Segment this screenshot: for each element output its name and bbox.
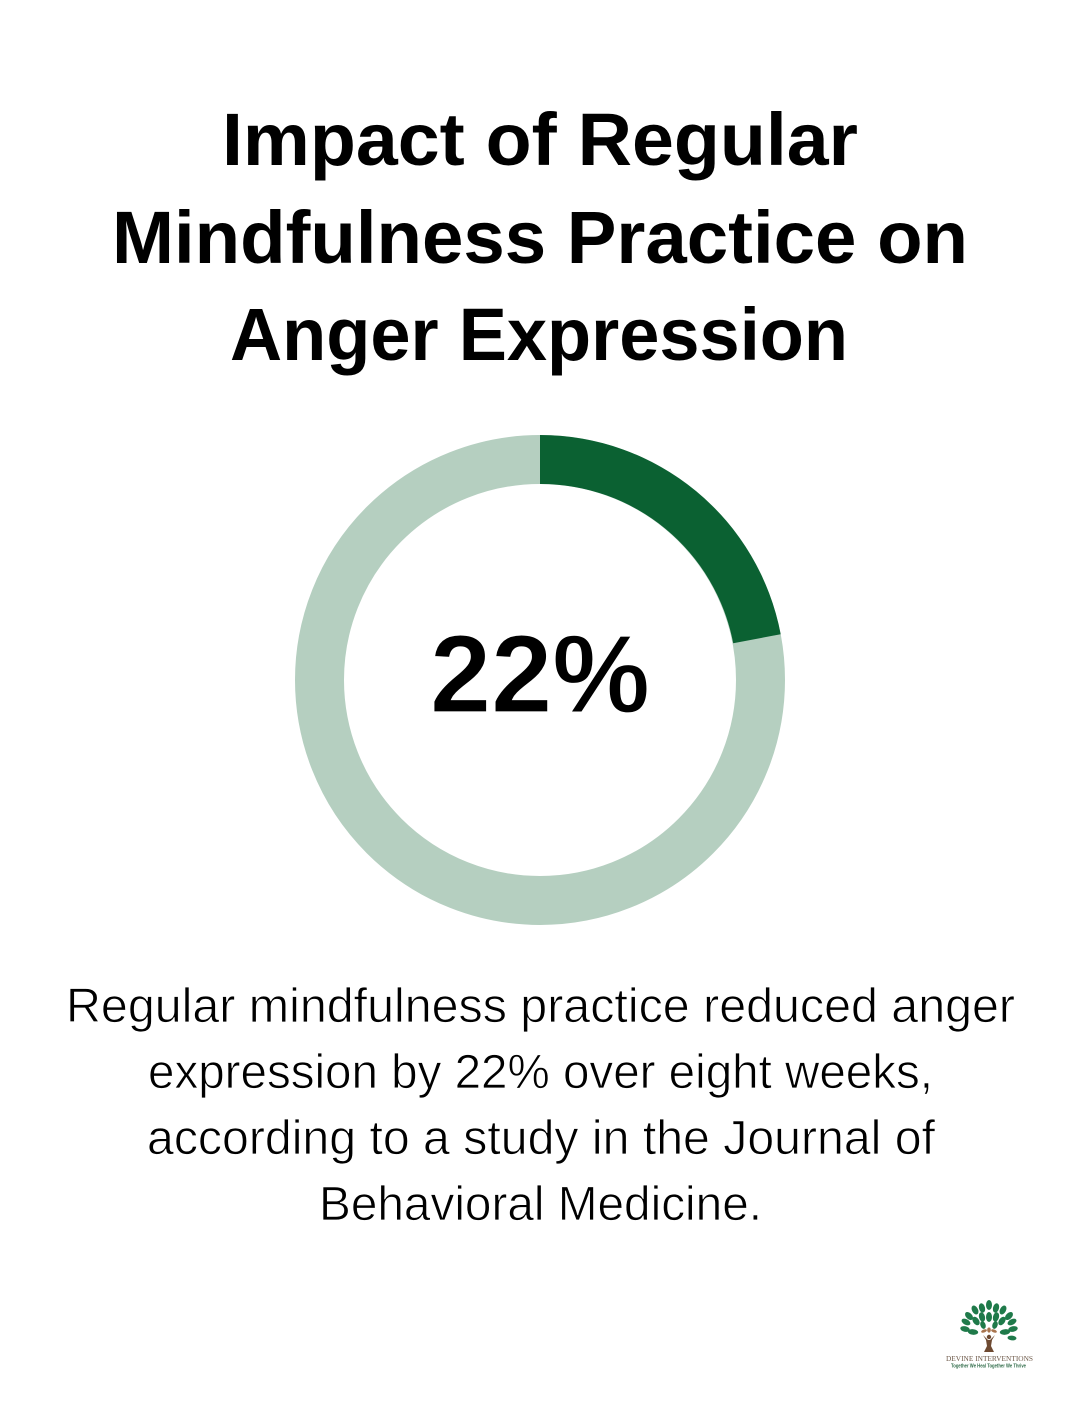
- logo tagline: Together We Heal Together We Thrive: [951, 1364, 1026, 1370]
- chart value: 22%: [430, 613, 650, 736]
- title: Mindfulness Practice on: [112, 196, 968, 279]
- chart track: [320, 460, 760, 900]
- chart highlighted segment: [540, 435, 781, 643]
- title: [112, 98, 968, 376]
- description text: Behavioral Medicine.: [319, 1178, 762, 1231]
- description text: expression by 22% over eight weeks,: [148, 1046, 933, 1099]
- icon: tree leaves: [960, 1300, 1018, 1341]
- logo name: DEVINE INTERVENTIONS: [946, 1354, 1033, 1363]
- logo: Devine Interventions: [946, 1300, 1033, 1370]
- description text: according to a study in the Journal of: [147, 1112, 936, 1165]
- icon: tree figure trunk: [981, 1327, 997, 1352]
- description text: [66, 980, 1015, 1231]
- title: Anger Expression: [230, 293, 848, 376]
- description text: Regular mindfulness practice reduced anger: [66, 980, 1015, 1033]
- title: Impact of Regular: [222, 98, 858, 181]
- donut chart: 22%: [320, 435, 781, 900]
